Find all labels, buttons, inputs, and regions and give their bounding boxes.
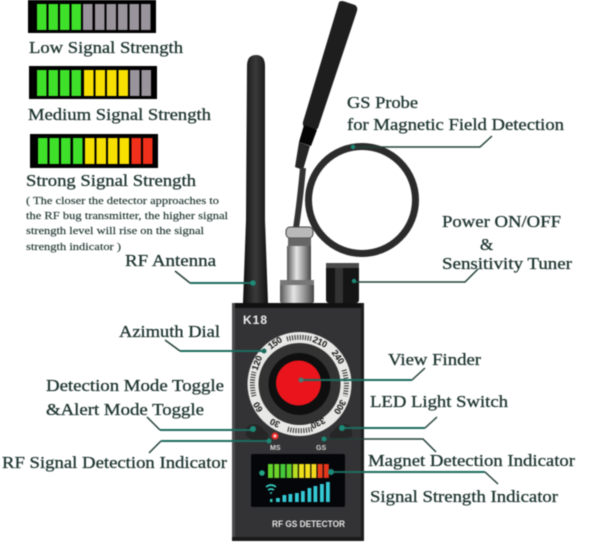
label: strong signal strength: Strong Signal Strength xyxy=(26,171,197,190)
note text: strength indicator ) xyxy=(26,241,121,253)
leader: power xyxy=(352,269,478,283)
note text: strength level will rise on the signal xyxy=(26,225,204,237)
view finder lens xyxy=(276,360,321,406)
note text: ( The closer the detector approaches to xyxy=(26,195,220,207)
label: azimuth dial: Azimuth Dial xyxy=(119,322,220,341)
azimuth dial: 60 xyxy=(251,400,265,414)
label: magnet detection indicator: Magnet Detection Indicator xyxy=(368,451,575,470)
connector xyxy=(280,227,314,303)
azimuth dial: 300 xyxy=(332,398,348,416)
azimuth dial: 120 xyxy=(250,354,264,372)
leader: RF antenna xyxy=(175,271,256,286)
leader: LED light switch xyxy=(339,417,437,431)
display screen xyxy=(251,454,345,507)
leader: view finder xyxy=(298,368,425,382)
medium signal bar xyxy=(29,66,157,99)
label: power: Power ON/OFF xyxy=(442,212,561,231)
label: signal strength indicator: Signal Strength Indicator xyxy=(370,487,558,506)
leader: RF signal detection indicator xyxy=(149,438,272,453)
leader: signal strength indicator xyxy=(328,469,498,484)
label: GS probe: GS Probe xyxy=(347,93,418,112)
leader: azimuth dial xyxy=(165,340,266,354)
note text xyxy=(26,195,228,253)
model label: K18 xyxy=(243,313,267,327)
device body xyxy=(232,303,364,541)
GS probe xyxy=(295,1,357,228)
leader: GS probe xyxy=(351,136,492,149)
label: RF antenna: RF Antenna xyxy=(125,251,216,270)
label: detection mode toggle: &Alert Mode Toggle xyxy=(46,400,204,419)
note text: the RF bug transmitter, the higher signal xyxy=(26,210,228,222)
label: view finder: View Finder xyxy=(388,350,481,369)
azimuth dial: 30 xyxy=(268,416,282,430)
label: detection mode toggle: Detection Mode Toggle xyxy=(46,376,224,395)
RF antenna xyxy=(243,55,268,303)
RF indicator LED: MS xyxy=(270,445,281,452)
label: GS probe: for Magnetic Field Detection xyxy=(347,115,565,134)
label: power: Sensitivity Tuner xyxy=(442,254,572,273)
low signal bar xyxy=(28,0,156,33)
label: GS probe xyxy=(347,93,565,134)
power knob xyxy=(326,263,359,303)
azimuth dial: 150 xyxy=(266,335,284,351)
RF indicator LED xyxy=(270,432,326,452)
label: low signal strength: Low Signal Strength xyxy=(29,38,184,57)
azimuth dial: 240 xyxy=(330,348,346,366)
label: detection mode toggle xyxy=(46,376,224,419)
label: RF signal detection indicator: RF Signal Detection Indicator xyxy=(2,453,227,472)
RF indicator LED: GS xyxy=(316,445,326,452)
device caption: RF GS DETECTOR xyxy=(272,519,345,529)
azimuth dial: 330 xyxy=(309,415,327,431)
leader: detection mode toggle xyxy=(147,417,256,432)
label: power: & xyxy=(480,235,493,254)
coiled cable xyxy=(308,146,416,254)
azimuth dial xyxy=(248,332,352,436)
strong signal bar xyxy=(30,134,158,168)
azimuth dial: 210 xyxy=(311,334,329,350)
label: power xyxy=(442,212,572,273)
label: medium signal strength: Medium Signal Strength xyxy=(28,105,212,124)
toggle buttons xyxy=(246,424,352,440)
leader: magnet detection indicator xyxy=(322,436,436,452)
label: LED light switch: LED Light Switch xyxy=(370,392,509,411)
